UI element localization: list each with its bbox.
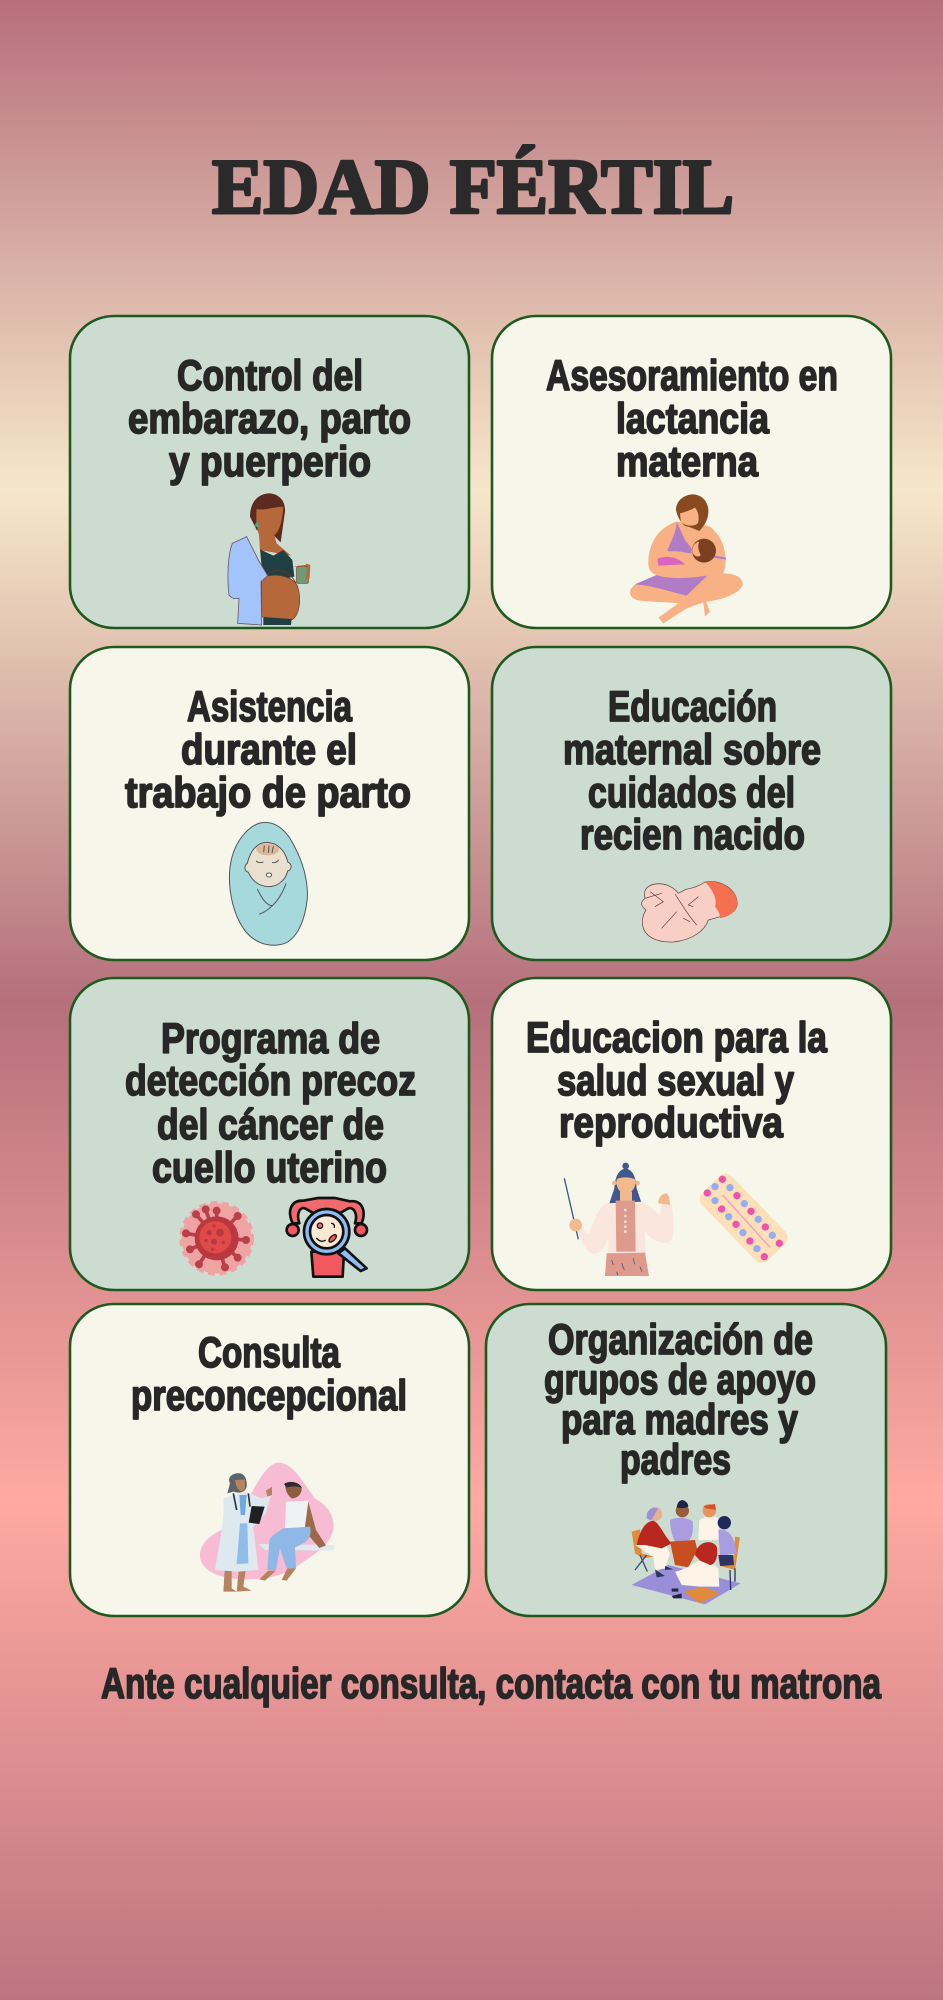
heading: educación para la salud sexual (526, 1014, 828, 1147)
card background (70, 316, 469, 628)
heading: grupos de apoyo (544, 1316, 816, 1484)
panel: control del embarazo (70, 316, 469, 628)
heading: asesoramiento en lactancia: materna (616, 438, 759, 486)
icon: breastfeeding mother (630, 494, 743, 623)
card background (492, 647, 891, 960)
heading: asistencia durante el trabajo de parto: Asistencia (187, 683, 353, 731)
panel: educación para la salud sexual (492, 978, 891, 1290)
panel: educación maternal (492, 647, 891, 960)
panel: asesoramiento en lactancia (492, 316, 891, 628)
heading: control del embarazo: embarazo, parto (128, 395, 411, 443)
card background (70, 647, 469, 960)
heading: educación para la salud sexual: salud sexual y (557, 1057, 794, 1105)
icon: doctor and patient (200, 1463, 335, 1592)
heading: consulta preconcepcional: preconcepcional (131, 1372, 407, 1420)
icon: support group circle (632, 1500, 741, 1604)
card background (70, 978, 469, 1290)
heading: consulta preconcepcional (131, 1329, 407, 1420)
panel: asistencia durante el trabajo de parto (70, 647, 469, 960)
heading: programa de detección precoz: Programa de (161, 1015, 380, 1063)
icon: pregnant woman with cup (228, 493, 310, 625)
heading: consulta preconcepcional: Consulta (198, 1329, 341, 1377)
icon: uterus with magnifier (287, 1198, 367, 1277)
heading: asesoramiento en lactancia (546, 352, 838, 486)
icon: contraceptive pill blister (696, 1170, 791, 1266)
heading: programa de detección precoz: del cáncer de (157, 1101, 384, 1149)
heading: grupos de apoyo: Organización de (548, 1316, 813, 1364)
card background (70, 1304, 469, 1616)
heading: educación para la salud sexual: reproductiva (559, 1099, 784, 1147)
heading: programa de detección precoz (125, 1015, 416, 1192)
icon: virus (182, 1203, 252, 1273)
icon: newborn curled (641, 882, 737, 942)
panel: programa de detección precoz (70, 978, 469, 1290)
heading: asesoramiento en lactancia: Asesoramiento en (546, 352, 838, 400)
panel: consulta preconcepcional (70, 1304, 469, 1616)
heading: programa de detección precoz: detección precoz (125, 1057, 416, 1105)
heading: educación maternal: maternal sobre (563, 726, 821, 774)
panel: grupos de apoyo (486, 1304, 886, 1616)
heading: control del embarazo: Control del (177, 352, 363, 400)
heading: educación maternal: Educación (608, 683, 777, 731)
heading: grupos de apoyo: grupos de apoyo (544, 1356, 816, 1404)
heading: asistencia durante el trabajo de parto: trabajo de parto (125, 769, 411, 817)
card background (486, 1304, 886, 1616)
title: EDAD FÉRTIL (212, 143, 734, 230)
heading: grupos de apoyo: padres (620, 1436, 731, 1484)
heading: educación para la salud sexual: Educacion para la (526, 1014, 828, 1062)
card background (492, 978, 891, 1290)
heading: control del embarazo: y puerperio (169, 438, 371, 486)
heading: control del embarazo (128, 352, 411, 486)
heading: asesoramiento en lactancia: lactancia (616, 395, 770, 443)
heading: educación maternal: cuidados del (588, 769, 795, 817)
heading: educación maternal (563, 683, 821, 859)
heading: asistencia durante el trabajo de parto (125, 683, 411, 817)
heading: asistencia durante el trabajo de parto: durante el (181, 726, 357, 774)
icon: teacher with pointer (564, 1163, 674, 1276)
heading: programa de detección precoz: cuello uterino (152, 1144, 387, 1192)
heading: grupos de apoyo: para madres y (561, 1396, 798, 1444)
heading: educación maternal: recien nacido (580, 811, 805, 859)
icon: swaddled baby (229, 822, 307, 945)
card background (492, 316, 891, 628)
